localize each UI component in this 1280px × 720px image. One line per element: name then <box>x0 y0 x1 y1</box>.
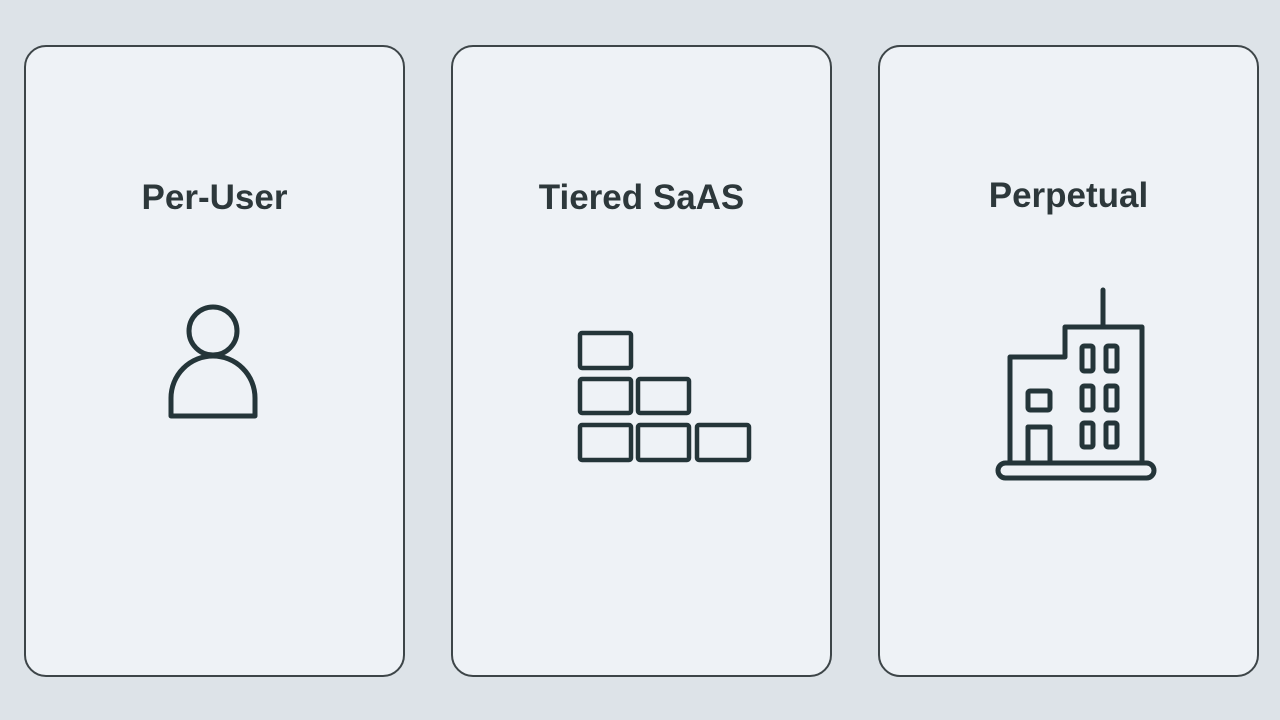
heading: perpetual: Perpetual <box>989 176 1148 215</box>
icon: tiered blocks <box>580 333 749 460</box>
icon: building <box>998 290 1154 478</box>
panel: per-user <box>24 45 405 677</box>
panel: tiered saas <box>451 45 832 677</box>
icon: person <box>171 307 255 416</box>
panel: perpetual <box>878 45 1259 677</box>
heading: tiered saas: Tiered SaAS <box>539 178 744 217</box>
heading: per-user: Per-User <box>142 178 287 217</box>
